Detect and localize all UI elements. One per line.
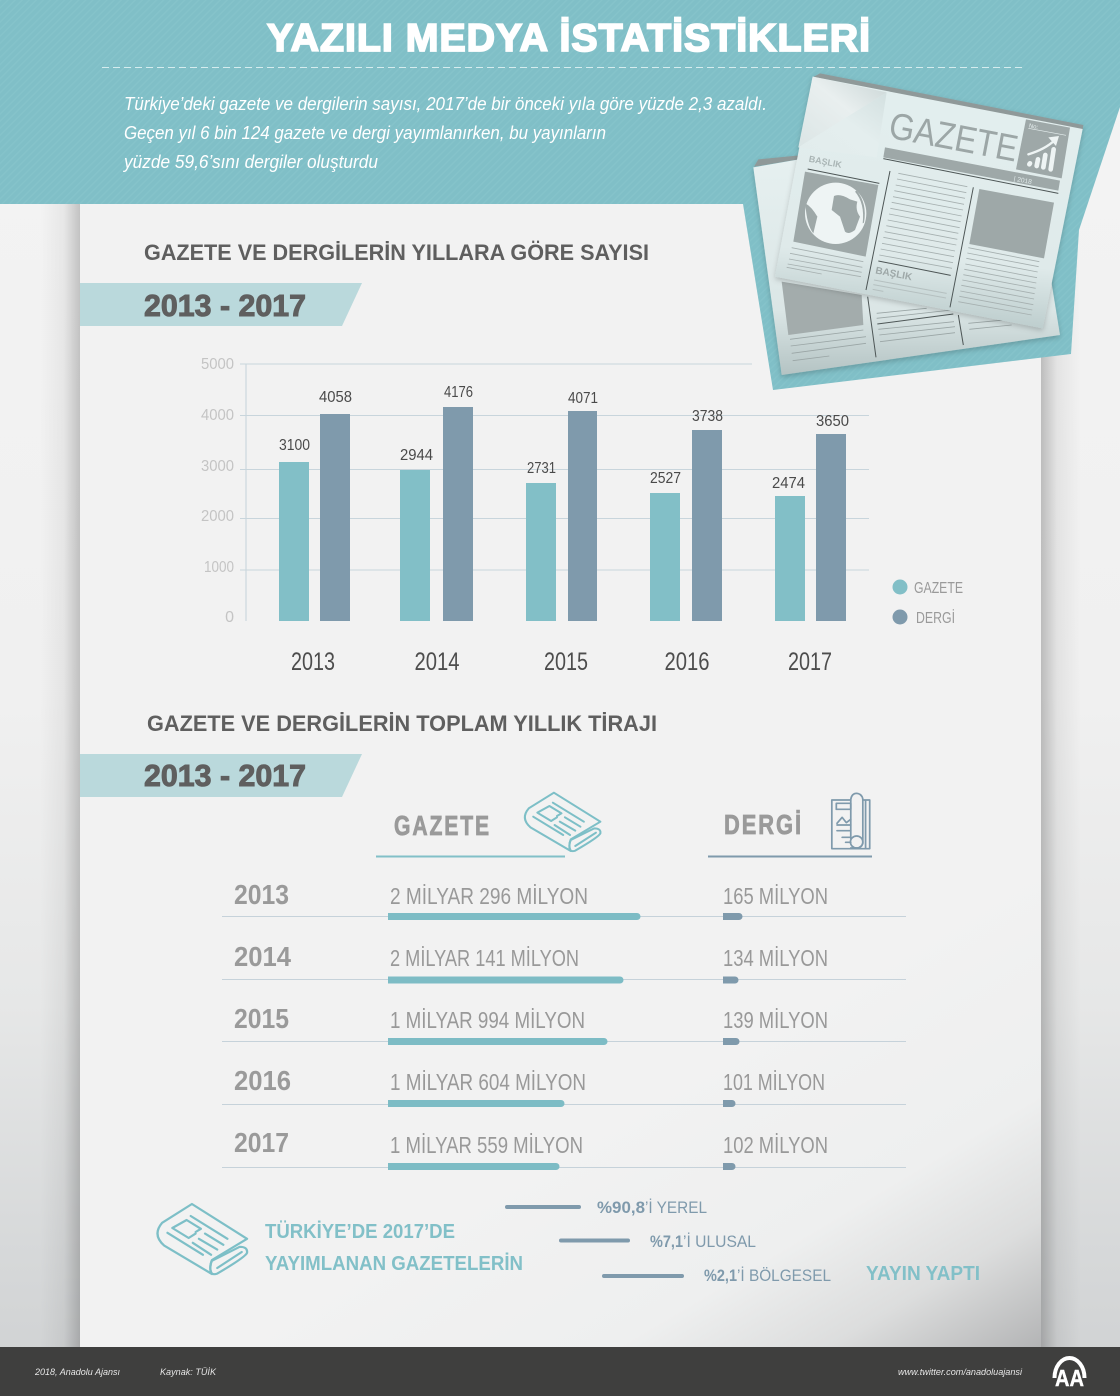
- share: ulusal: [561, 1232, 756, 1251]
- share: ulusal: %7,1: [650, 1232, 683, 1251]
- share: ulusal: ’İ ULUSAL: [683, 1232, 756, 1251]
- year range band 1: [80, 283, 362, 326]
- y axis labels: 4000: [201, 407, 234, 424]
- footer credits: [34, 1367, 1023, 1378]
- globe image: [793, 172, 878, 257]
- dergi values: 134 MİLYON: [723, 945, 828, 971]
- value labels: 3100: [279, 437, 310, 454]
- gazete bars: [388, 913, 640, 1170]
- intro text: Türkiye’deki gazete ve dergilerin sayısı, 2017’de bir önceki yıla göre yüzde 2,3 azaldı.: [124, 94, 767, 114]
- y axis labels: 0: [225, 609, 234, 626]
- right image: [969, 189, 1054, 258]
- value labels: 3650: [816, 413, 849, 430]
- icon: magazine: [832, 793, 870, 849]
- intro text: [122, 94, 767, 172]
- row years: 2013: [234, 879, 289, 910]
- dergi bars: [723, 913, 742, 1170]
- column header: dergi: DERGİ: [724, 809, 803, 840]
- chart icon: No:: [1028, 123, 1039, 131]
- value labels: 2944: [400, 447, 433, 464]
- masthead GAZETE: GAZETE: [886, 104, 1021, 170]
- year labels: [291, 648, 832, 676]
- value labels: 2731: [527, 460, 556, 477]
- share: yerel: [507, 1198, 707, 1217]
- legend: [892, 580, 963, 627]
- main panel: [80, 204, 1041, 1347]
- value labels: [279, 384, 849, 492]
- value labels: 2474: [772, 475, 805, 492]
- year range band 1: 2013 - 2017: [144, 288, 306, 323]
- title: YAZILI MEDYA İSTATİSTİKLERİ: [267, 17, 871, 60]
- gazete values: 1 MİLYAR 994 MİLYON: [390, 1007, 585, 1033]
- column header: gazete: GAZETE: [394, 810, 491, 841]
- row years: 2016: [234, 1065, 291, 1096]
- column header: gazete: [376, 793, 600, 856]
- intro text: Geçen yıl 6 bin 124 gazete ve dergi yayımlanırken, bu yayınların: [124, 123, 606, 143]
- logo: AA: AA: [1055, 1365, 1084, 1391]
- share: bolgesel: [604, 1266, 831, 1285]
- gazete values: [390, 883, 588, 1158]
- dergi values: [723, 883, 828, 1158]
- heading: yearly count: GAZETE VE DERGİLERİN YILLARA GÖRE SAYISI: [144, 240, 649, 265]
- share: bolgesel: ’İ BÖLGESEL: [737, 1266, 831, 1285]
- header band: [0, 0, 1120, 390]
- y axis labels: 2000: [201, 508, 234, 525]
- panel shadow right: [1041, 204, 1081, 1347]
- icon: newspaper: [525, 793, 600, 851]
- value labels: 4176: [444, 384, 473, 401]
- dergi bars: [320, 407, 846, 621]
- gazete values: 2 MİLYAR 296 MİLYON: [390, 883, 588, 909]
- icon: newspaper large: [157, 1204, 247, 1274]
- year range band 2: [80, 754, 362, 797]
- year labels: 2013: [291, 648, 335, 676]
- y axis labels: 1000: [204, 559, 234, 576]
- chart icon: [1016, 119, 1070, 178]
- row years: 2015: [234, 1003, 289, 1034]
- panel shadow left: [40, 204, 80, 1347]
- y axis labels: 3000: [201, 458, 234, 475]
- y axis labels: [201, 356, 234, 626]
- front newspaper: | 2018: [1013, 176, 1033, 186]
- dergi values: 101 MİLYON: [723, 1069, 825, 1095]
- row years: 2014: [234, 941, 291, 972]
- bar chart: [201, 356, 869, 676]
- footer: [0, 1347, 1120, 1396]
- article heading: BAŞLIK: [874, 265, 914, 283]
- year labels: 2015: [544, 648, 588, 676]
- gazete values: 1 MİLYAR 604 MİLYON: [390, 1069, 586, 1095]
- share: bolgesel: %2,1: [704, 1266, 737, 1285]
- y axis labels: 5000: [201, 356, 234, 373]
- legend: DERGİ: [916, 608, 955, 627]
- yayin yapti: YAYIN YAPTI: [866, 1263, 980, 1285]
- column header: dergi: [708, 793, 872, 856]
- value labels: 4071: [568, 390, 598, 407]
- gazete bars: [279, 462, 805, 621]
- table rows: [222, 879, 906, 1170]
- gazete values: 2 MİLYAR 141 MİLYON: [390, 945, 579, 971]
- year labels: 2016: [664, 648, 710, 676]
- value labels: 2527: [650, 470, 681, 487]
- heading: circulation: GAZETE VE DERGİLERİN TOPLAM YILLIK TİRAJI: [147, 711, 657, 736]
- year labels: 2014: [414, 648, 460, 676]
- left column heading: BAŞLIK: [808, 154, 843, 170]
- footer credits: www.twitter.com/anadoluajansi: [898, 1367, 1023, 1378]
- dergi values: 165 MİLYON: [723, 883, 828, 909]
- value labels: 4058: [319, 389, 352, 406]
- front newspaper: [775, 73, 1083, 328]
- footer credits: 2018, Anadolu Ajansı: [34, 1367, 120, 1378]
- legend: GAZETE: [914, 580, 963, 597]
- illustration: newspapers: [753, 73, 1083, 375]
- share: yerel: ’İ YEREL: [645, 1198, 707, 1217]
- gazete values: 1 MİLYAR 559 MİLYON: [390, 1132, 583, 1158]
- dergi values: 139 MİLYON: [723, 1007, 828, 1033]
- footer credits: Kaynak: TÜİK: [160, 1367, 217, 1378]
- summary text: TÜRKİYE’DE 2017’DE: [265, 1220, 455, 1243]
- intro text: yüzde 59,6’sını dergiler oluşturdu: [122, 152, 378, 172]
- folded corner: [798, 77, 887, 157]
- share: yerel: %90,8: [597, 1198, 645, 1217]
- column dividers: [866, 171, 973, 307]
- text lines: [787, 173, 1039, 315]
- year range band 2: 2013 - 2017: [144, 758, 306, 793]
- dergi values: 102 MİLYON: [723, 1132, 828, 1158]
- row years: [234, 879, 291, 1158]
- summary text: YAYIMLANAN GAZETELERİN: [265, 1252, 523, 1275]
- back newspaper: [753, 155, 1060, 375]
- year labels: 2017: [788, 648, 832, 676]
- value labels: 3738: [692, 408, 723, 425]
- summary text: [265, 1220, 523, 1275]
- row years: 2017: [234, 1127, 289, 1158]
